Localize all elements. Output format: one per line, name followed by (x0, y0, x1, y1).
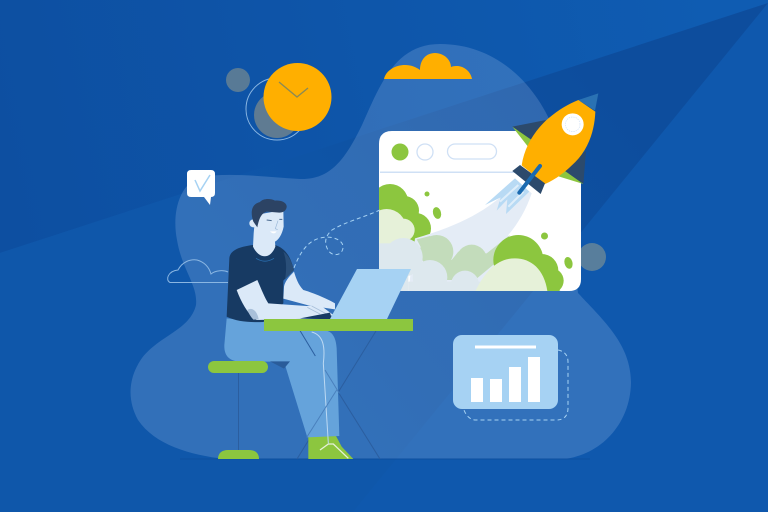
hair (252, 199, 287, 227)
icon: speech bubble with check (187, 170, 215, 205)
upper body (227, 199, 335, 322)
shirt (227, 245, 294, 322)
panel: browser window (367, 131, 581, 299)
rocket flame (485, 178, 529, 214)
stool seat (208, 361, 268, 373)
figure: person (224, 199, 353, 459)
rocket body (522, 100, 595, 184)
dashed card shadow (464, 350, 568, 420)
bar chart card (453, 335, 568, 420)
face details (267, 219, 282, 221)
icon: clock (226, 63, 332, 140)
bars (471, 357, 540, 402)
smoke clouds (379, 184, 564, 291)
rocket base (512, 165, 545, 194)
icon: rocket (485, 93, 598, 214)
dashed flight path (294, 210, 380, 268)
head and neck (249, 219, 257, 227)
side circle behind window (578, 243, 606, 271)
rocket fins (512, 120, 546, 148)
collar (256, 258, 274, 261)
stool base (218, 450, 259, 459)
rocket window (562, 113, 584, 135)
icon: outline cloud (168, 260, 228, 282)
ground line (180, 458, 590, 460)
rocket nose (578, 93, 598, 111)
laptop (330, 269, 411, 319)
table top (264, 319, 413, 331)
smoke droplets (424, 192, 574, 270)
icon: orange cloud (384, 53, 472, 79)
legs and shoe (224, 318, 353, 459)
arms (283, 272, 335, 309)
background blob (131, 44, 631, 459)
table legs and stool (238, 331, 380, 459)
browser toolbar (380, 144, 580, 173)
